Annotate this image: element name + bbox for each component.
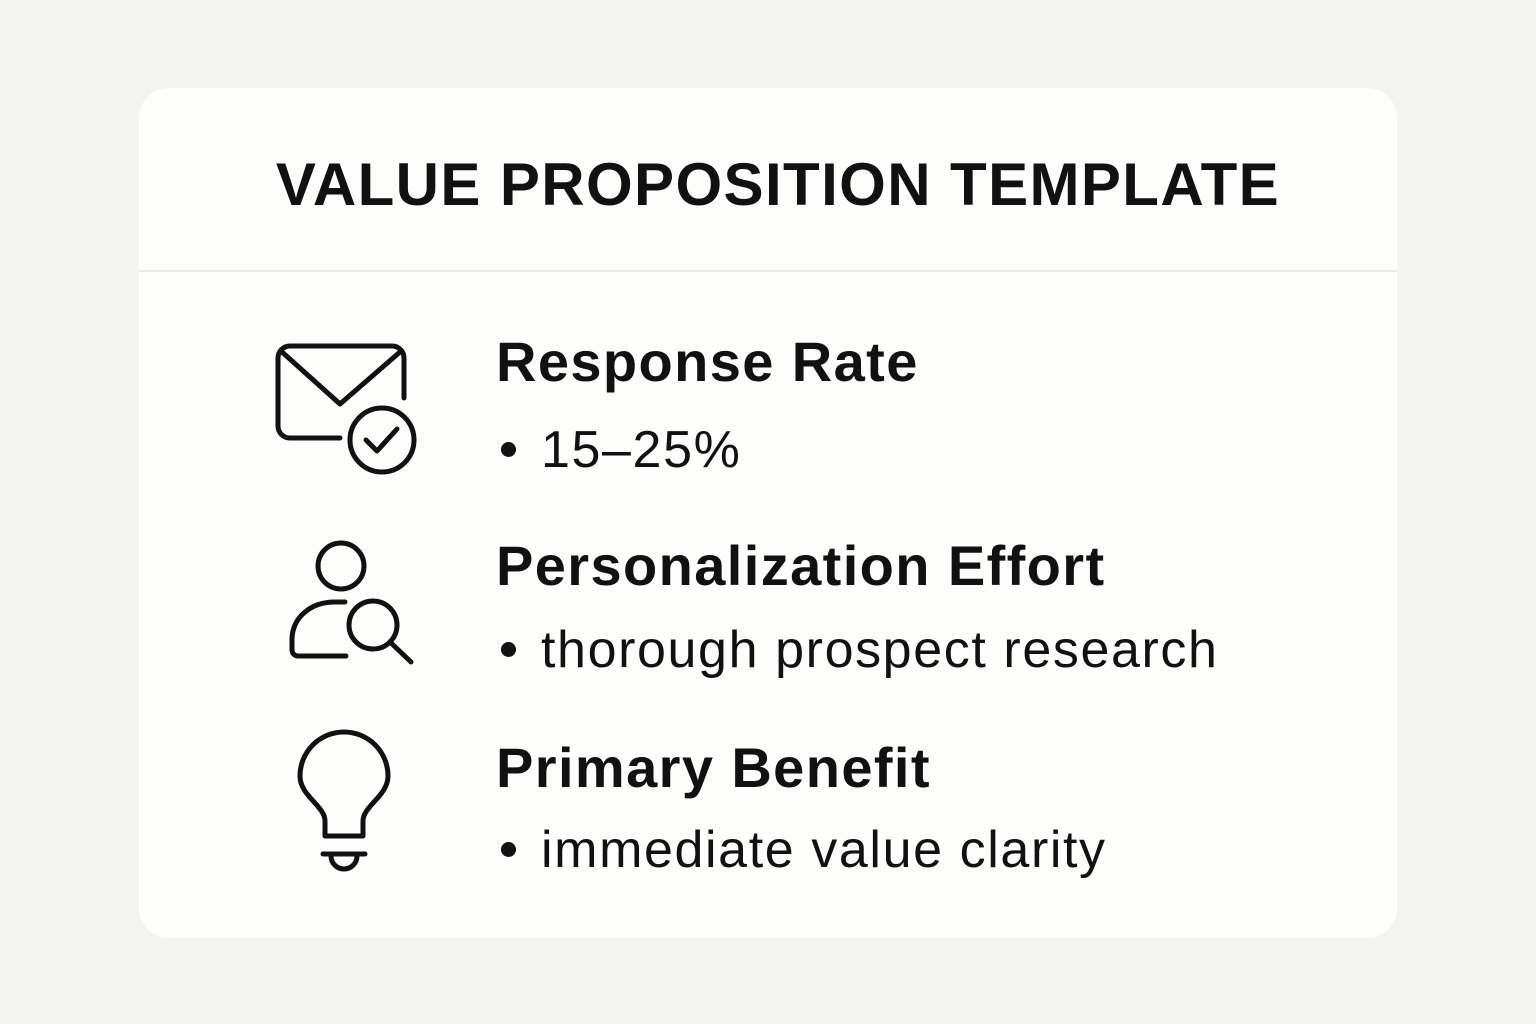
icon: light bulb — [300, 732, 388, 869]
icon: envelope with check — [278, 346, 414, 472]
heading: Primary Benefit: Primary Benefit — [496, 736, 931, 799]
title: VALUE PROPOSITION TEMPLATE — [276, 151, 1280, 218]
bullet: clarity: immediate value clarity — [541, 821, 1107, 879]
card panel — [139, 88, 1397, 938]
bullet: 15-25%: 15–25% — [541, 421, 741, 479]
icon: person with magnifier — [292, 543, 411, 662]
bullet: research: thorough prospect research — [541, 621, 1219, 679]
heading: Personalization Effort: Personalization Effort — [496, 534, 1106, 597]
heading: Response Rate: Response Rate — [496, 330, 919, 393]
